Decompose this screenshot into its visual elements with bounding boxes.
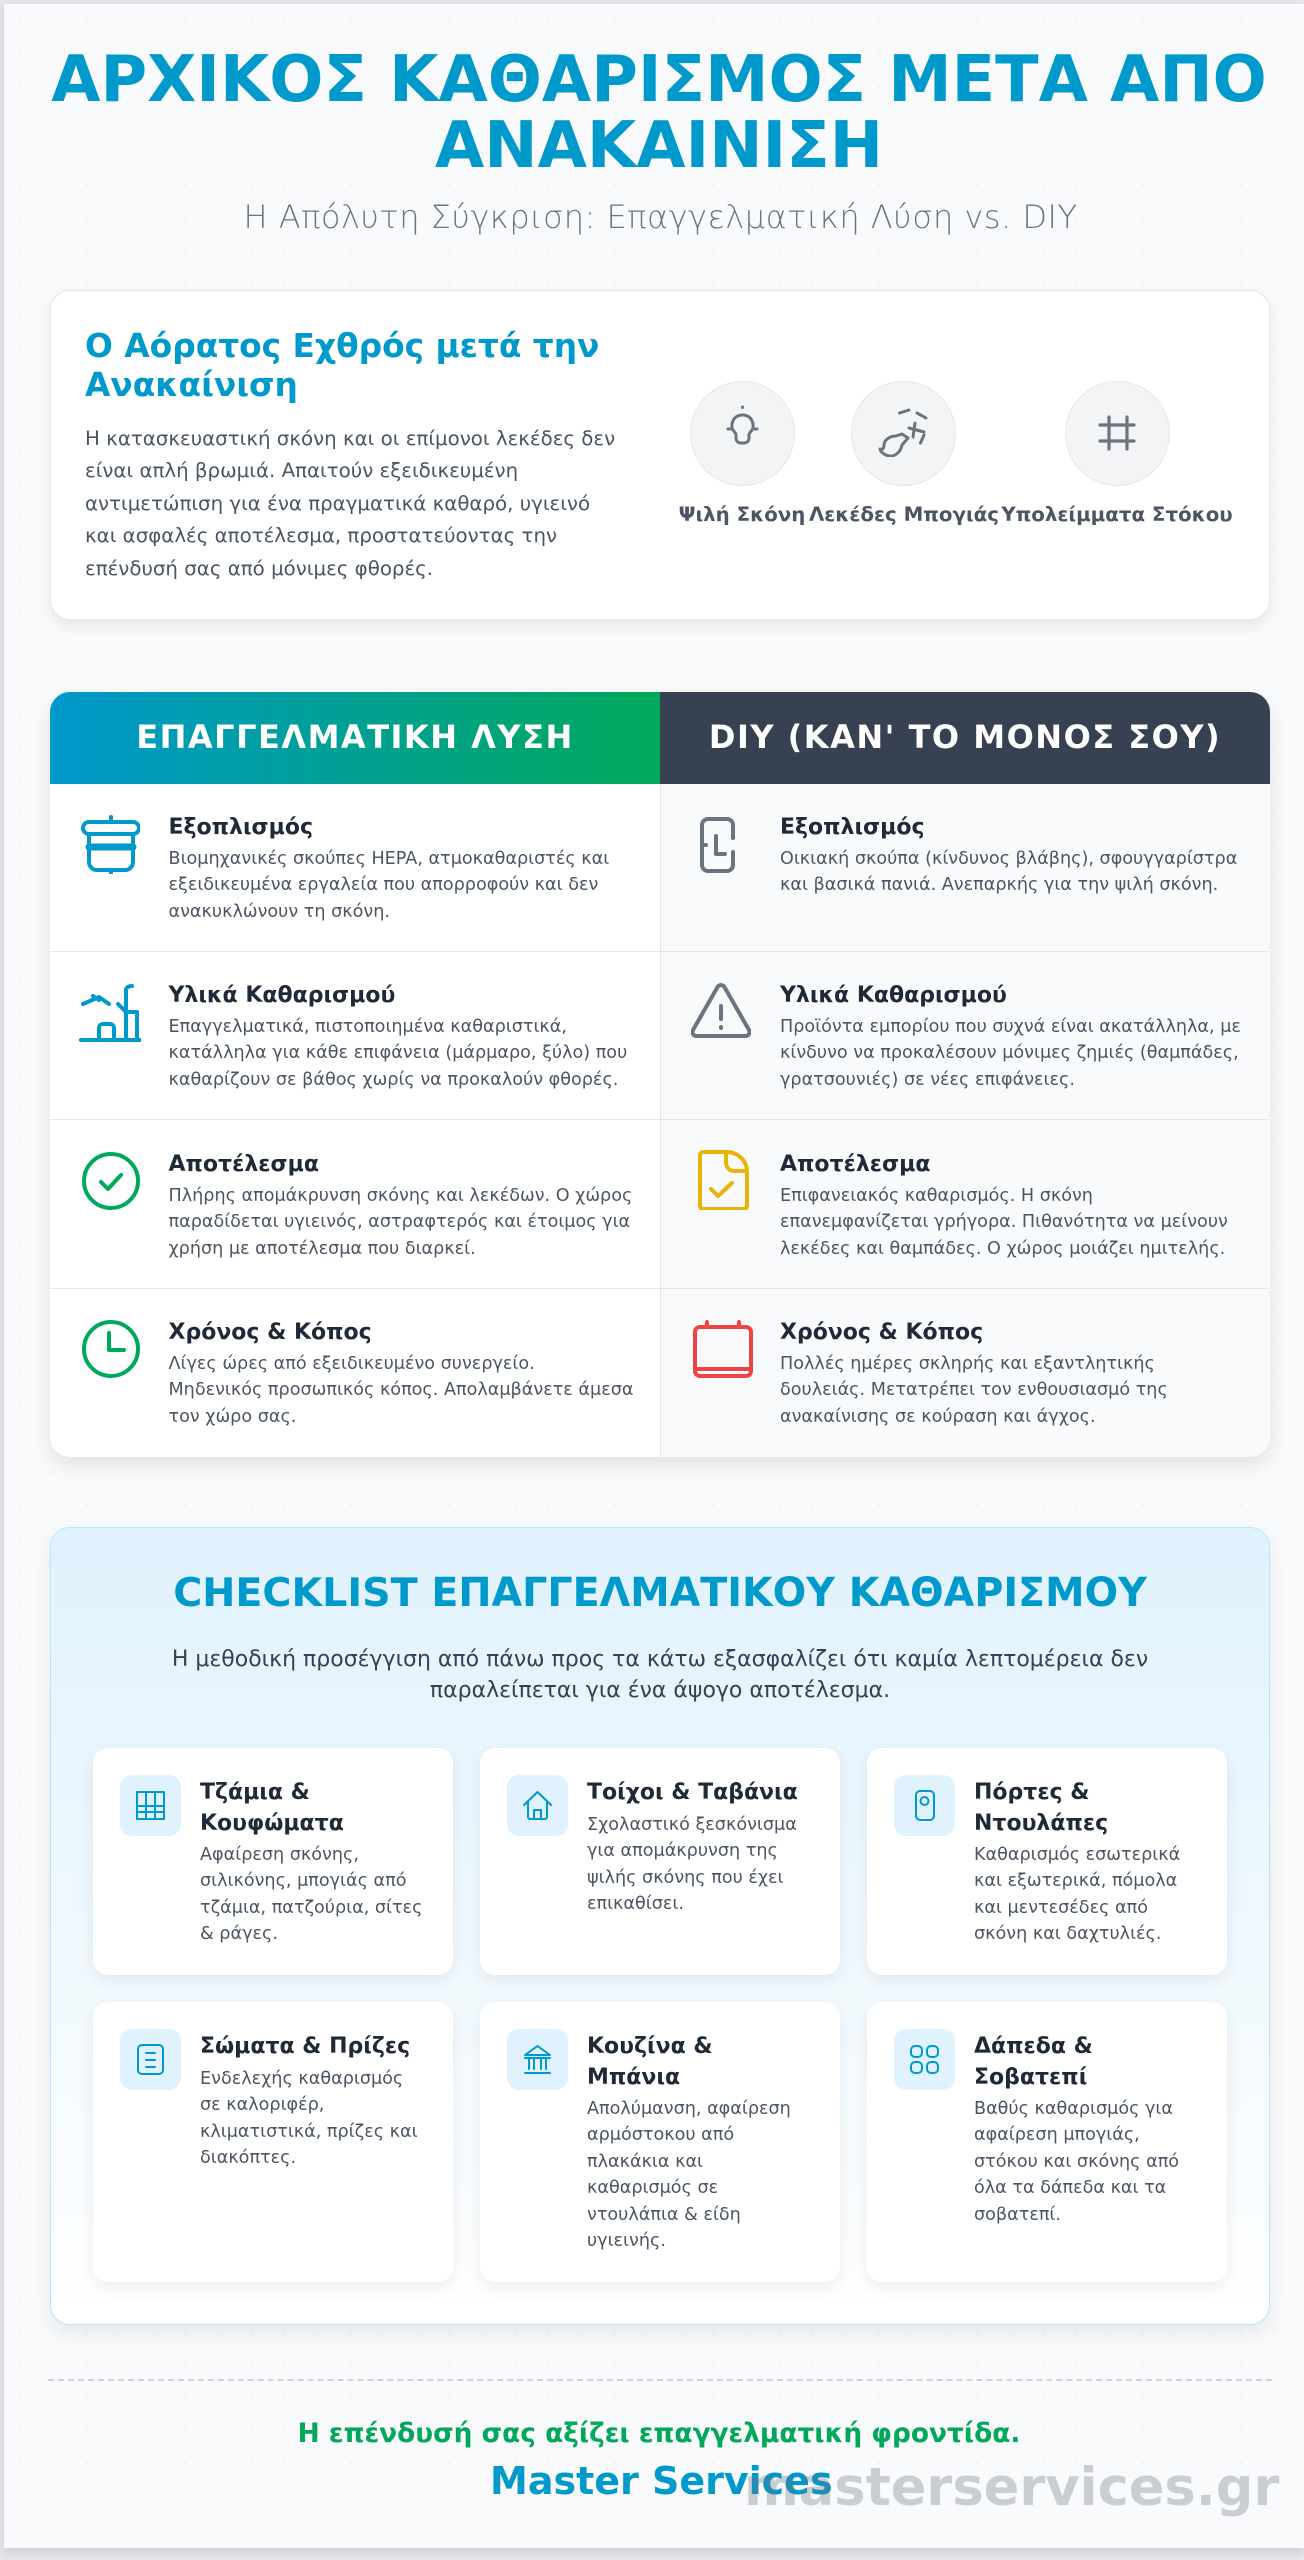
icon: door xyxy=(894,1775,955,1836)
card title: Κουφώματα xyxy=(200,1811,344,1836)
card text: και εξωτερικά, πόμολα xyxy=(974,1871,1177,1891)
card text xyxy=(587,1815,797,1914)
icon: equipment xyxy=(81,815,140,874)
text xyxy=(780,849,1237,895)
text: καθαρίζουν σε βάθος χωρίς να προκαλούν φθορές. xyxy=(168,1070,618,1090)
card text: διακόπτες. xyxy=(200,2148,296,2168)
header: DIY: DIY (ΚΑΝ' ΤΟ ΜΟΝΟΣ ΣΟΥ) xyxy=(709,718,1221,756)
card title xyxy=(587,2034,713,2090)
title: ΑΝΑΚΑΙΝΙΣΗ xyxy=(435,108,883,182)
intro heading xyxy=(85,327,599,404)
card text: επικαθίσει. xyxy=(587,1894,684,1914)
card text: Σχολαστικό ξεσκόνισμα xyxy=(587,1815,797,1835)
card text: σιλικόνης, μπογιάς από xyxy=(200,1871,406,1891)
text: δουλειάς. Μετατρέπει τον ενθουσιασμό της xyxy=(780,1380,1168,1400)
text xyxy=(780,1017,1241,1090)
row: professional result xyxy=(50,1121,660,1289)
icon: materials xyxy=(79,984,141,1042)
text: Βιομηχανικές σκούπες HEPA, ατμοκαθαριστές και xyxy=(168,849,609,869)
icon: warning triangle xyxy=(691,983,751,1038)
label: paint stains: Λεκέδες Μπογιάς xyxy=(809,503,999,526)
text: κίνδυνο να προκαλέσουν μόνιμες ζημιές (θαμπάδες, xyxy=(780,1043,1239,1063)
checklist intro: Η μεθοδική προσέγγιση από πάνω προς τα κάτω εξασφαλίζει ότι καμία λεπτομέρεια δεν xyxy=(172,1647,1148,1672)
card title: Κουζίνα & xyxy=(587,2034,713,2059)
text: γρατσουνιές) σε νέες επιφάνειες. xyxy=(780,1070,1075,1090)
header: professional xyxy=(50,692,660,784)
icon: bank building xyxy=(507,2029,568,2090)
icon: radiator xyxy=(120,2029,181,2090)
card text: σοβατεπί. xyxy=(974,2205,1061,2225)
title: Εξοπλισμός xyxy=(780,815,925,840)
icon: window grid xyxy=(120,1775,181,1836)
label: fine dust: Ψιλή Σκόνη xyxy=(679,503,805,526)
card text: υγιεινής. xyxy=(587,2231,666,2251)
DIY column background xyxy=(660,784,1270,1457)
footer tagline: Η επένδυσή σας αξίζει επαγγελματική φροντίδα. xyxy=(298,2418,1020,2449)
icon: grout residue xyxy=(1065,381,1170,486)
icon: four squares xyxy=(894,2029,955,2090)
icon: household vacuum xyxy=(700,817,735,873)
card text: & ράγες. xyxy=(200,1924,278,1944)
card title: Μπάνια xyxy=(587,2065,680,2090)
card text: σε καλοριφέρ, xyxy=(200,2095,324,2115)
row: professional equipment xyxy=(50,784,660,952)
card title: Τζάμια & xyxy=(200,1780,310,1805)
text: Πλήρης απομάκρυνση σκόνης και λεκέδων. Ο χώρος xyxy=(168,1186,632,1206)
card: windows xyxy=(93,1748,453,1975)
header: DIY xyxy=(660,692,1270,784)
text: ανακυκλώνουν τη σκόνη. xyxy=(168,902,390,922)
footer brand: Master Services xyxy=(490,2459,833,2503)
intro text: επένδυσή σας από μόνιμες φθορές. xyxy=(85,557,433,580)
text xyxy=(168,1017,627,1090)
card text: κλιματιστικά, πρίζες και xyxy=(200,2122,418,2142)
icon: check circle xyxy=(82,1152,140,1210)
card text: πλακάκια και xyxy=(587,2152,703,2172)
text: Προϊόντα εμπορίου που συχνά είναι ακατάλληλα, με xyxy=(780,1017,1241,1037)
card text: ψιλής σκόνης που έχει xyxy=(587,1868,784,1888)
card text: Αφαίρεση σκόνης, xyxy=(200,1845,359,1865)
intro text: και ασφαλές αποτέλεσμα, προστατεύοντας την xyxy=(85,524,557,547)
title: Υλικά Καθαρισμού xyxy=(168,983,395,1008)
row: professional materials xyxy=(50,952,660,1120)
text xyxy=(780,1354,1168,1427)
title: Αποτέλεσμα xyxy=(780,1152,930,1177)
card text: όλα τα δάπεδα και τα xyxy=(974,2178,1166,2198)
card title: Πόρτες & xyxy=(974,1780,1089,1805)
text: ανακαίνισης σε κούραση και άγχος. xyxy=(780,1407,1096,1427)
intro heading: Ο Αόρατος Εχθρός μετά την xyxy=(85,327,599,365)
card: walls xyxy=(480,1748,840,1975)
icon: house xyxy=(507,1775,568,1836)
card title: Ντουλάπες xyxy=(974,1811,1108,1836)
card text: τζάμια, πατζούρια, σίτες xyxy=(200,1898,422,1918)
card text: Βαθύς καθαρισμός για xyxy=(974,2099,1173,2119)
card: radiators xyxy=(93,2002,453,2282)
card text: Καθαρισμός εσωτερικά xyxy=(974,1845,1180,1865)
card text xyxy=(200,2069,418,2168)
text: Πολλές ημέρες σκληρής και εξαντλητικής xyxy=(780,1354,1155,1374)
card: kitchen xyxy=(480,2002,840,2282)
text: Λίγες ώρες από εξειδικευμένο συνεργείο. xyxy=(168,1354,535,1374)
checklist intro: παραλείπεται για ένα άψογο αποτέλεσμα. xyxy=(430,1678,890,1703)
card text xyxy=(974,1845,1180,1944)
panel: comparison table xyxy=(50,692,1270,1457)
title: Υλικά Καθαρισμού xyxy=(780,983,1007,1008)
card text xyxy=(974,2099,1179,2225)
icon: document check xyxy=(698,1150,749,1210)
label: grout residue: Υπολείμματα Στόκου xyxy=(1001,503,1233,526)
card title: Σοβατεπί xyxy=(974,2065,1087,2090)
card text xyxy=(587,2099,791,2251)
title: ΑΡΧΙΚΟΣ ΚΑΘΑΡΙΣΜΟΣ ΜΕΤΑ ΑΠΟ xyxy=(51,43,1267,117)
text: επανεμφανίζεται γρήγορα. Πιθανότητα να μείνουν xyxy=(780,1212,1228,1232)
card text: στόκου και σκόνης από xyxy=(974,2152,1179,2172)
text xyxy=(780,1186,1228,1259)
title: Αποτέλεσμα xyxy=(168,1152,319,1177)
text: παραδίδεται υγιεινός, αστραφτερός και έτοιμος για xyxy=(168,1212,630,1232)
checklist heading: CHECKLIST ΕΠΑΓΓΕΛΜΑΤΙΚΟΥ ΚΑΘΑΡΙΣΜΟΥ xyxy=(173,1570,1147,1616)
text: Επιφανειακός καθαρισμός. Η σκόνη xyxy=(780,1186,1093,1206)
icon: fine dust xyxy=(690,381,795,486)
panel: checklist xyxy=(50,1527,1270,2325)
text: κατάλληλα για κάθε επιφάνεια (μάρμαρο, ξύλο) που xyxy=(168,1043,627,1063)
card text: ντουλάπια & είδη xyxy=(587,2205,741,2225)
row: DIY equipment xyxy=(660,784,1270,952)
text: εξειδικευμένα εργαλεία που απορροφούν και δεν xyxy=(168,875,598,895)
watermark: masterservices.gr xyxy=(744,2457,1279,2518)
card text: για απομάκρυνση της xyxy=(587,1841,778,1861)
card: floors xyxy=(867,2002,1227,2282)
text: Μηδενικός προσωπικός κόπος. Απολαμβάνετε άμεσα xyxy=(168,1380,633,1400)
card title: Τοίχοι & Ταβάνια xyxy=(587,1780,798,1805)
text: λεκέδες και θαμπάδες. Ο χώρος μοιάζει ημιτελής. xyxy=(780,1239,1225,1259)
intro text: είναι απλή βρωμιά. Απαιτούν εξειδικευμένη xyxy=(85,459,518,482)
card text: αρμόστοκου από xyxy=(587,2125,734,2145)
intro text xyxy=(85,427,615,580)
intro text: Η κατασκευαστική σκόνη και οι επίμονοι λεκέδες δεν xyxy=(85,427,615,450)
text: τον χώρο σας. xyxy=(168,1407,296,1427)
subtitle: Η Απόλυτη Σύγκριση: Επαγγελματική Λύση vs. DIY xyxy=(244,198,1078,236)
intro text: αντιμετώπιση για ένα πραγματικά καθαρό, υγιεινό xyxy=(85,492,590,515)
card text xyxy=(200,1845,422,1944)
card title: Σώματα & Πρίζες xyxy=(200,2034,410,2059)
row: professional time xyxy=(82,1320,633,1427)
row: DIY time xyxy=(693,1320,1168,1427)
title: Χρόνος & Κόπος xyxy=(168,1320,372,1345)
card title xyxy=(974,2034,1093,2090)
title: Εξοπλισμός xyxy=(168,815,313,840)
text: Οικιακή σκούπα (κίνδυνος βλάβης), σφουγγαρίστρα xyxy=(780,849,1237,869)
title xyxy=(51,43,1267,182)
title: Χρόνος & Κόπος xyxy=(780,1320,983,1345)
icon: clock xyxy=(82,1320,140,1378)
text: και βασικά πανιά. Ανεπαρκής για την ψιλή σκόνη. xyxy=(780,875,1218,895)
card: doors xyxy=(867,1748,1227,1975)
panel: intro xyxy=(50,290,1270,620)
card text: Απολύμανση, αφαίρεση xyxy=(587,2099,791,2119)
text: χρήση με αποτέλεσμα που διαρκεί. xyxy=(168,1239,476,1259)
checklist intro xyxy=(172,1647,1148,1703)
intro heading: Ανακαίνιση xyxy=(85,366,298,404)
card text: αφαίρεση μπογιάς, xyxy=(974,2125,1140,2145)
header: professional: ΕΠΑΓΓΕΛΜΑΤΙΚΗ ΛΥΣΗ xyxy=(136,718,574,756)
card title: Δάπεδα & xyxy=(974,2034,1093,2059)
text: Επαγγελματικά, πιστοποιημένα καθαριστικά, xyxy=(168,1017,567,1037)
text xyxy=(168,849,609,922)
text xyxy=(168,1186,632,1259)
text xyxy=(168,1354,633,1427)
icon: calendar xyxy=(693,1320,753,1378)
card text: Ενδελεχής καθαρισμός xyxy=(200,2069,403,2089)
row: DIY result xyxy=(660,1121,1270,1289)
card text: και μεντεσέδες από xyxy=(974,1898,1148,1918)
card title xyxy=(200,1780,344,1836)
icon: paint stains xyxy=(851,381,956,486)
card text: σκόνη και δαχτυλιές. xyxy=(974,1924,1161,1944)
card title xyxy=(974,1780,1108,1836)
card text: καθαρισμός σε xyxy=(587,2178,718,2198)
row: DIY materials xyxy=(660,952,1270,1120)
